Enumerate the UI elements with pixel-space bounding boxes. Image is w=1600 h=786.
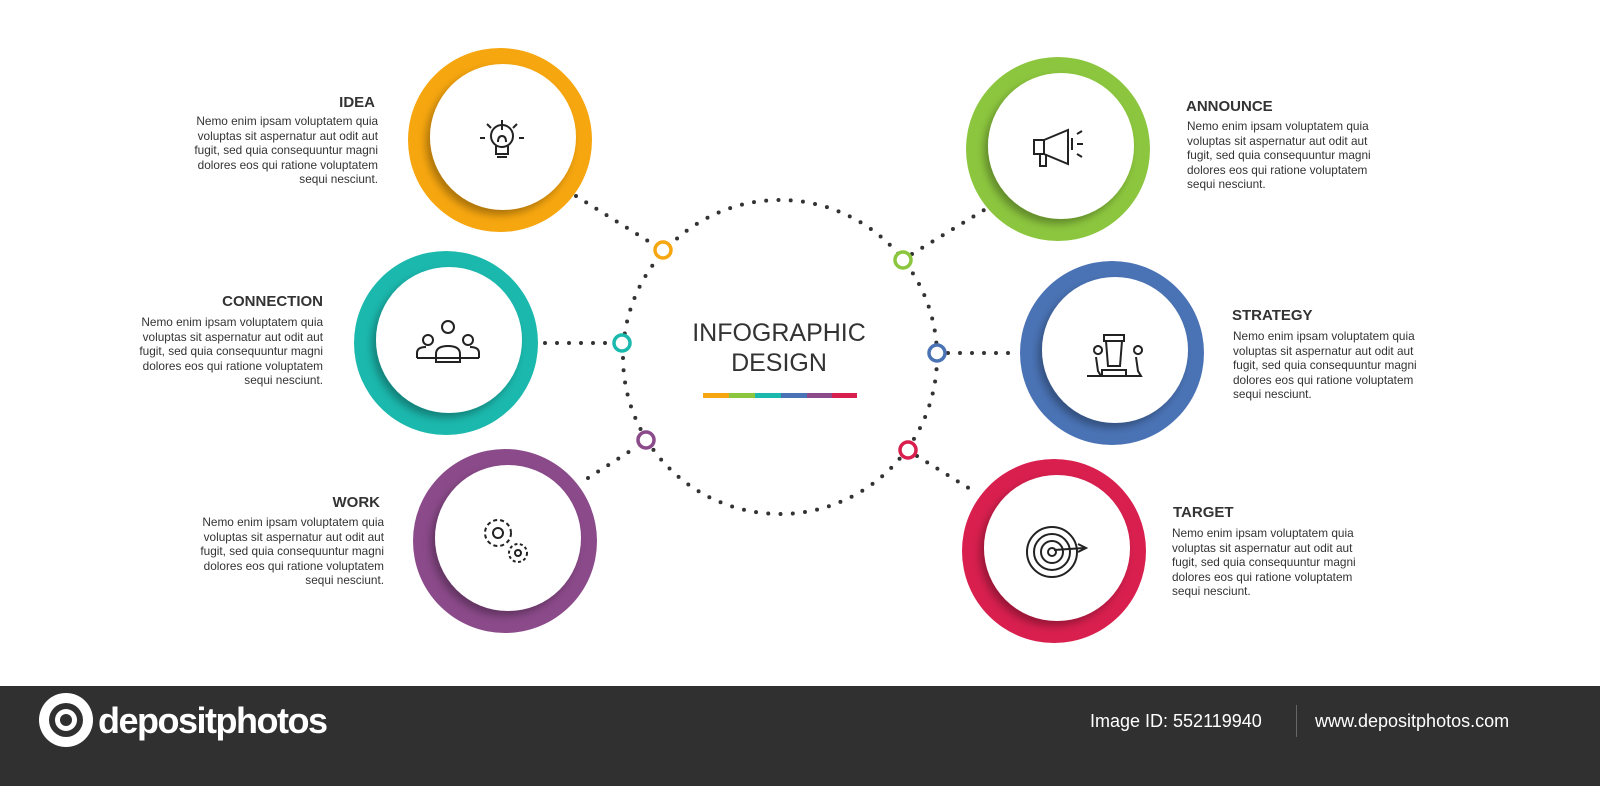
ring: announce xyxy=(966,57,1150,241)
text: idea xyxy=(194,94,379,186)
text: target: voluptas sit aspernatur aut odit aut xyxy=(1172,541,1353,555)
text: idea: voluptas sit aspernatur aut odit aut xyxy=(198,129,379,143)
ring: idea xyxy=(408,48,592,232)
footer bar: depositphotos xyxy=(98,700,327,741)
text: work: voluptas sit aspernatur aut odit aut xyxy=(204,530,385,544)
nodes xyxy=(614,242,945,458)
text: work: WORK xyxy=(332,494,380,511)
text: work: fugit, sed quia consequuntur magni xyxy=(200,544,384,558)
ring: target xyxy=(962,459,1146,643)
text: strategy: fugit, sed quia consequuntur magni xyxy=(1233,358,1417,372)
text: connection: fugit, sed quia consequuntur magni xyxy=(139,344,323,358)
text: strategy: STRATEGY xyxy=(1232,307,1313,324)
footer bar xyxy=(0,686,1600,786)
text: strategy: sequi nesciunt. xyxy=(1233,387,1312,401)
text: connection: Nemo enim ipsam voluptatem quia xyxy=(141,315,323,329)
text: announce: fugit, sed quia consequuntur magni xyxy=(1187,148,1371,162)
center title xyxy=(692,319,866,398)
text: idea: sequi nesciunt. xyxy=(299,172,378,186)
text: connection: sequi nesciunt. xyxy=(244,373,323,387)
text: connection: dolores eos qui ratione voluptatem xyxy=(143,359,323,373)
text: strategy: voluptas sit aspernatur aut odit aut xyxy=(1233,344,1414,358)
text: announce xyxy=(1186,98,1371,191)
text: idea: IDEA xyxy=(339,94,375,111)
text: work: sequi nesciunt. xyxy=(305,573,384,587)
ring: work xyxy=(413,449,597,633)
footer bar: www.depositphotos.com xyxy=(1314,711,1509,731)
central dotted circle xyxy=(623,200,937,514)
text: target: sequi nesciunt. xyxy=(1172,584,1251,598)
ring: connection xyxy=(354,251,538,435)
text: target: dolores eos qui ratione voluptatem xyxy=(1172,570,1353,584)
text: announce: dolores eos qui ratione voluptatem xyxy=(1187,163,1368,177)
text: announce: Nemo enim ipsam voluptatem quia xyxy=(1187,119,1369,133)
ring: strategy xyxy=(1020,261,1204,445)
text: connection xyxy=(139,293,324,387)
text: connection: voluptas sit aspernatur aut odit aut xyxy=(143,330,324,344)
text: work: Nemo enim ipsam voluptatem quia xyxy=(202,515,384,529)
text: target xyxy=(1172,504,1356,598)
text: announce: sequi nesciunt. xyxy=(1187,177,1266,191)
text: target: fugit, sed quia consequuntur magni xyxy=(1172,555,1356,569)
text: work xyxy=(200,494,385,587)
text: target: Nemo enim ipsam voluptatem quia xyxy=(1172,526,1354,540)
text: strategy: dolores eos qui ratione voluptatem xyxy=(1233,373,1414,387)
text: strategy: Nemo enim ipsam voluptatem quia xyxy=(1233,329,1415,343)
text: announce: voluptas sit aspernatur aut odit aut xyxy=(1187,134,1368,148)
footer bar: Image ID: 552119940 xyxy=(1090,711,1262,731)
center title: DESIGN xyxy=(731,349,827,377)
text: connection: CONNECTION xyxy=(222,293,323,310)
text: strategy xyxy=(1232,307,1417,401)
text: idea: dolores eos qui ratione voluptatem xyxy=(198,158,378,172)
center title: INFOGRAPHIC xyxy=(692,319,866,347)
text: announce: ANNOUNCE xyxy=(1186,98,1273,115)
text: idea: Nemo enim ipsam voluptatem quia xyxy=(196,114,378,128)
connectors xyxy=(545,196,1020,492)
text: idea: fugit, sed quia consequuntur magni xyxy=(194,143,378,157)
text: work: dolores eos qui ratione voluptatem xyxy=(204,559,384,573)
text: target: TARGET xyxy=(1173,504,1234,521)
